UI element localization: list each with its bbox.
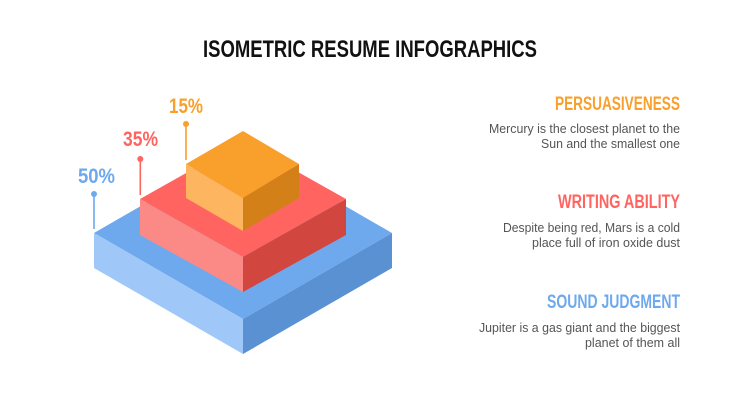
blue layer: [94, 147, 392, 354]
pin: 35%: 35%: [123, 128, 158, 151]
title: ISOMETRIC RESUME INFOGRAPHICS: [203, 36, 537, 63]
text block: writing ability: Despite being red, Mars is a cold: [503, 221, 680, 235]
orange layer: [186, 131, 299, 231]
text block: persuasiveness: [489, 94, 680, 151]
pin: 50%: 50%: [78, 165, 115, 188]
text block: sound judgment: SOUND JUDGMENT: [547, 292, 680, 313]
text block: persuasiveness: Sun and the smallest one: [541, 137, 680, 151]
isometric pyramid chart: [94, 131, 392, 354]
pin: 15%: [169, 95, 203, 160]
text block: sound judgment: Jupiter is a gas giant and the biggest: [479, 321, 681, 335]
text block: writing ability: place full of iron oxide dust: [532, 236, 681, 250]
text block: writing ability: [503, 192, 681, 250]
text block: persuasiveness: Mercury is the closest planet to the: [489, 122, 680, 136]
text block: sound judgment: [479, 292, 681, 350]
red layer: [140, 141, 346, 292]
pin: 15%: 15%: [169, 95, 203, 118]
pin: 50%: [78, 165, 115, 229]
text block: writing ability: WRITING ABILITY: [558, 192, 680, 213]
text block: persuasiveness: PERSUASIVENESS: [555, 94, 680, 115]
pin: 35%: [123, 128, 158, 195]
text block: sound judgment: planet of them all: [585, 336, 680, 350]
